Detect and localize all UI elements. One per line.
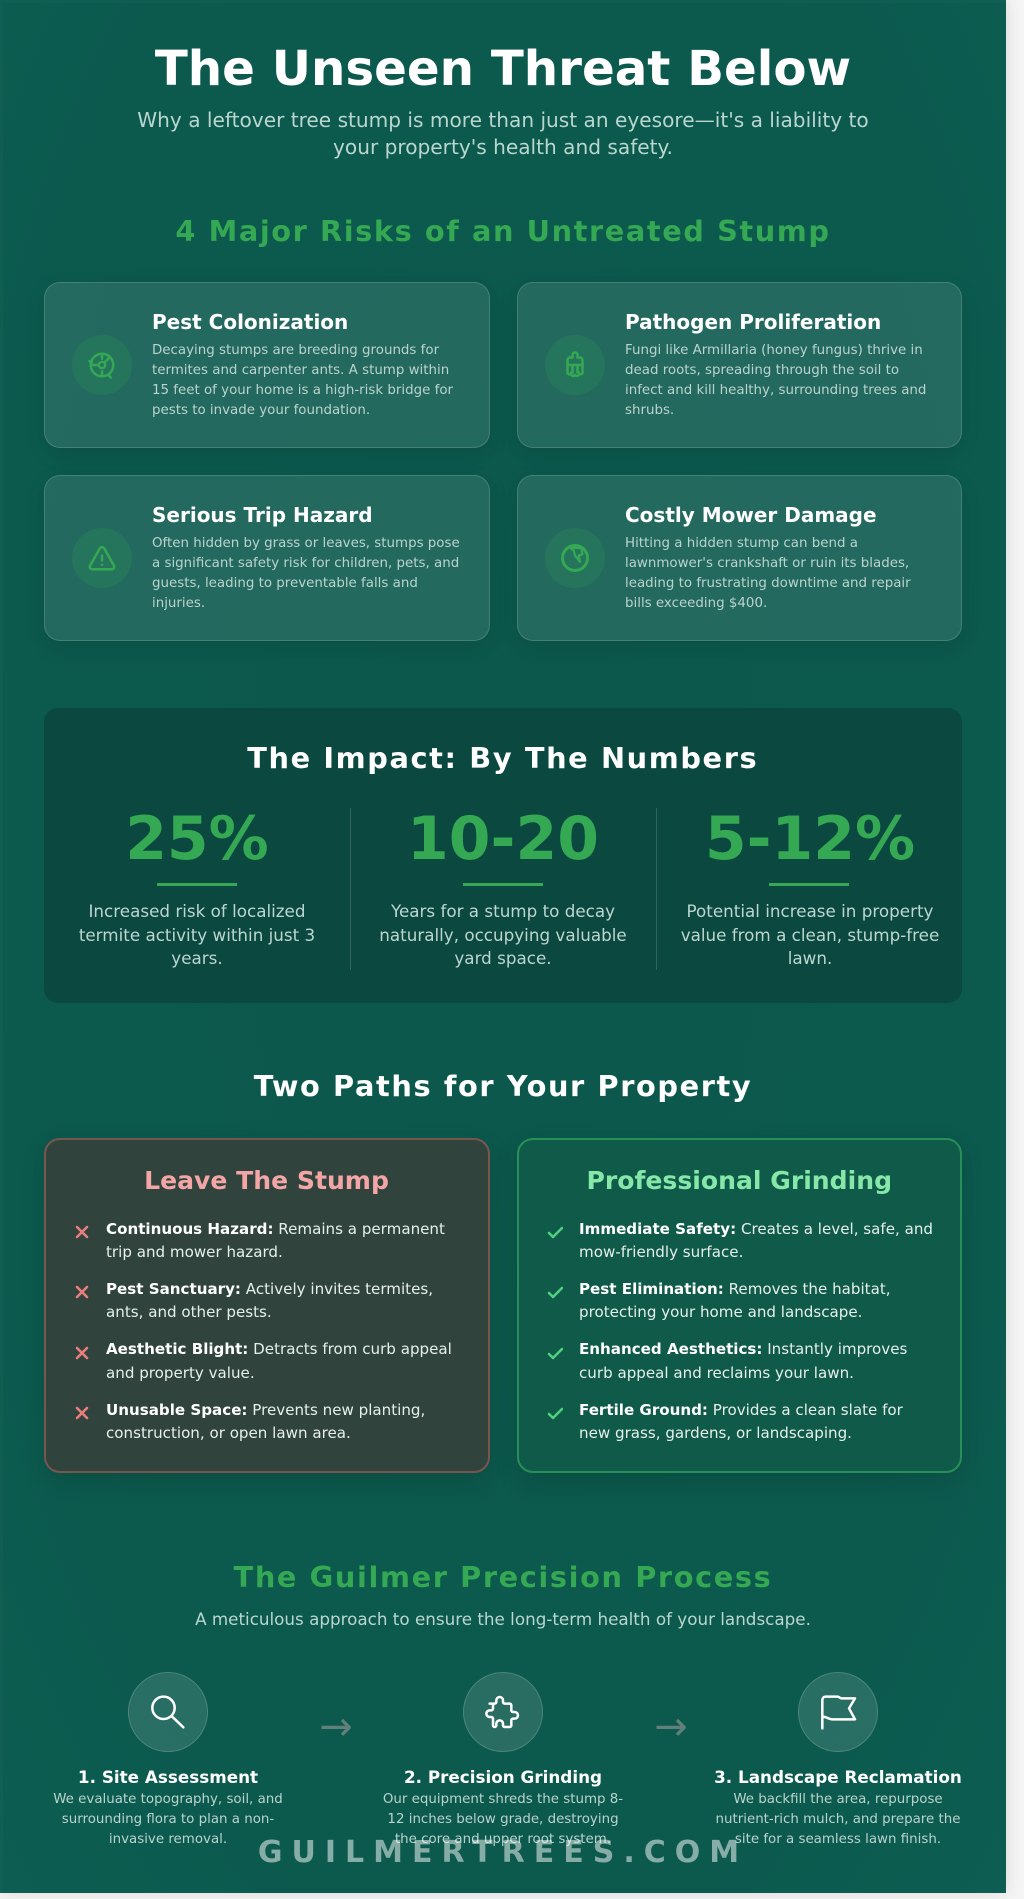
text: infect and kill healthy, surrounding trees and (625, 383, 926, 398)
item: Immediate Safety: Creates a level, safe, and (579, 1220, 933, 1238)
item: Pest Sanctuary: Actively invites termites, (106, 1280, 433, 1298)
heading: leave: Leave The Stump (144, 1166, 389, 1195)
text (625, 342, 926, 418)
mark (548, 1408, 563, 1420)
stat text (379, 901, 627, 968)
mark (76, 1346, 88, 1360)
text: Decaying stumps are breeding grounds for (152, 342, 439, 358)
step 2 text (383, 1792, 623, 1847)
item (106, 1220, 445, 1261)
list: leave (76, 1220, 452, 1442)
item: Unusable Space: Prevents new planting, (106, 1401, 425, 1419)
subtitle: your property's health and safety. (333, 134, 673, 158)
stat number 25%: 25% (125, 804, 269, 874)
arrow: → (319, 1704, 353, 1750)
icon: mower blade (545, 528, 605, 588)
item (106, 1340, 452, 1382)
stat text: termite activity within just 3 (79, 924, 315, 944)
item (579, 1340, 907, 1382)
text: Fungi like Armillaria (honey fungus) thrive in (625, 342, 923, 358)
text: a significant safety risk for children, pets, and (152, 556, 459, 571)
item (579, 1220, 933, 1261)
step 1: site assessment (53, 1672, 283, 1847)
item: construction, or open lawn area. (106, 1424, 351, 1442)
stat rule (463, 883, 543, 886)
panel: pest colonization (44, 282, 490, 448)
mark (548, 1348, 563, 1360)
heading: two paths: Two Paths for Your Property (254, 1069, 752, 1103)
stat number 5-12%: 5-12% (705, 804, 915, 874)
step 1 text: invasive removal. (109, 1832, 227, 1847)
panel: professional grinding (516, 1138, 962, 1473)
stat text: Increased risk of localized (88, 901, 306, 921)
heading: grinding: Professional Grinding (586, 1166, 892, 1195)
stat text (681, 901, 939, 968)
mark (76, 1286, 88, 1298)
step 3: landscape reclamation (714, 1672, 962, 1847)
heading: 4 major risks: 4 Major Risks of an Untreated Stump (175, 214, 831, 248)
step 2 text: Our equipment shreds the stump 8- (383, 1792, 623, 1807)
text: 15 feet of your home is a high-risk bridge for (152, 383, 453, 398)
stat text: lawn. (788, 948, 832, 968)
panel: leave the stump (44, 1138, 490, 1473)
item: Fertile Ground: Provides a clean slate for (579, 1401, 903, 1419)
text: pests to invade your foundation. (152, 403, 370, 418)
stat text: Potential increase in property (687, 901, 933, 921)
mark (76, 1406, 88, 1420)
icon: search (128, 1672, 208, 1752)
heading: impact: The Impact: By The Numbers (247, 741, 758, 775)
item: Enhanced Aesthetics: Instantly improves (579, 1340, 907, 1358)
step 2 text: 12 inches below grade, destroying (387, 1812, 619, 1827)
panel: impact stats (44, 708, 962, 1003)
item: new grass, gardens, or landscaping. (579, 1424, 852, 1442)
item: protecting your home and landscape. (579, 1303, 862, 1321)
stat number 10-20: 10-20 (407, 804, 599, 874)
text: Often hidden by grass or leaves, stumps pose (152, 536, 460, 550)
icon: warning triangle (72, 528, 132, 588)
text: Hitting a hidden stump can bend a (625, 536, 858, 550)
text (152, 536, 460, 611)
icon: flag (798, 1672, 878, 1752)
stat text: years. (171, 948, 223, 968)
process subtitle: A meticulous approach to ensure the long-term health of your landscape. (195, 1608, 811, 1628)
step 1 text (53, 1792, 283, 1847)
item: and property value. (106, 1364, 255, 1382)
icon: puzzle (463, 1672, 543, 1752)
subtitle (137, 108, 869, 158)
stat text: value from a clean, stump-free (681, 924, 939, 944)
text (625, 536, 911, 611)
heading: Costly Mower Damage (625, 503, 877, 527)
step 2: precision grinding (383, 1672, 623, 1847)
text: leading to frustrating downtime and repair (625, 576, 911, 591)
item (106, 1401, 425, 1442)
stat rule (157, 883, 237, 886)
panel: mower damage (516, 475, 962, 641)
list: grinding (548, 1220, 933, 1442)
stat text (79, 901, 315, 968)
stat rule (769, 883, 849, 886)
stat text: yard space. (454, 948, 552, 968)
item: trip and mower hazard. (106, 1243, 283, 1261)
arrow: → (654, 1704, 688, 1750)
item (579, 1280, 891, 1321)
step 1 title: 1. Site Assessment (78, 1767, 258, 1787)
step 3 title: 3. Landscape Reclamation (714, 1767, 962, 1787)
mark (76, 1226, 88, 1238)
panel: trip hazard (44, 475, 490, 641)
text: termites and carpenter ants. A stump within (152, 363, 449, 378)
text: shrubs. (625, 403, 674, 418)
text: dead roots, spreading through the soil to (625, 363, 899, 378)
heading: Pest Colonization (152, 310, 348, 334)
stat text: Years for a stump to decay (391, 901, 615, 921)
text: guests, leading to preventable falls and (152, 576, 418, 591)
item: Aesthetic Blight: Detracts from curb appeal (106, 1340, 452, 1358)
item: mow-friendly surface. (579, 1243, 743, 1261)
text: injuries. (152, 596, 205, 611)
step 3 text: site for a seamless lawn finish. (735, 1832, 941, 1847)
panel: pathogen proliferation (516, 282, 962, 448)
icon: pest target (72, 335, 132, 395)
step 2 text: the core and upper root system. (395, 1832, 611, 1847)
subtitle: Why a leftover tree stump is more than just an eyesore—it's a liability to (137, 108, 869, 132)
item: ants, and other pests. (106, 1303, 272, 1321)
text: bills exceeding $400. (625, 596, 767, 611)
item (106, 1280, 433, 1321)
text: lawnmower's crankshaft or ruin its blades, (625, 556, 909, 571)
step 1 text: surrounding flora to plan a non- (62, 1812, 274, 1827)
mark (548, 1286, 563, 1298)
icon: pathogen brush (545, 335, 605, 395)
watermark: GUILMERTREES.COM (258, 1835, 748, 1870)
item: Pest Elimination: Removes the habitat, (579, 1280, 891, 1298)
item: Continuous Hazard: Remains a permanent (106, 1220, 445, 1238)
stat text: naturally, occupying valuable (379, 924, 627, 944)
item: curb appeal and reclaims your lawn. (579, 1364, 854, 1382)
heading: Serious Trip Hazard (152, 503, 373, 527)
step 3 text (716, 1792, 960, 1847)
heading: Pathogen Proliferation (625, 310, 881, 334)
mark (548, 1226, 563, 1238)
item (579, 1401, 903, 1442)
heading: process: The Guilmer Precision Process (234, 1560, 772, 1594)
text (152, 342, 453, 418)
title: The Unseen Threat Below (155, 41, 851, 97)
step 2 title: 2. Precision Grinding (404, 1767, 602, 1787)
step 1 text: We evaluate topography, soil, and (53, 1792, 283, 1807)
step 3 text: nutrient-rich mulch, and prepare the (716, 1812, 960, 1827)
step 3 text: We backfill the area, repurpose (733, 1792, 943, 1807)
